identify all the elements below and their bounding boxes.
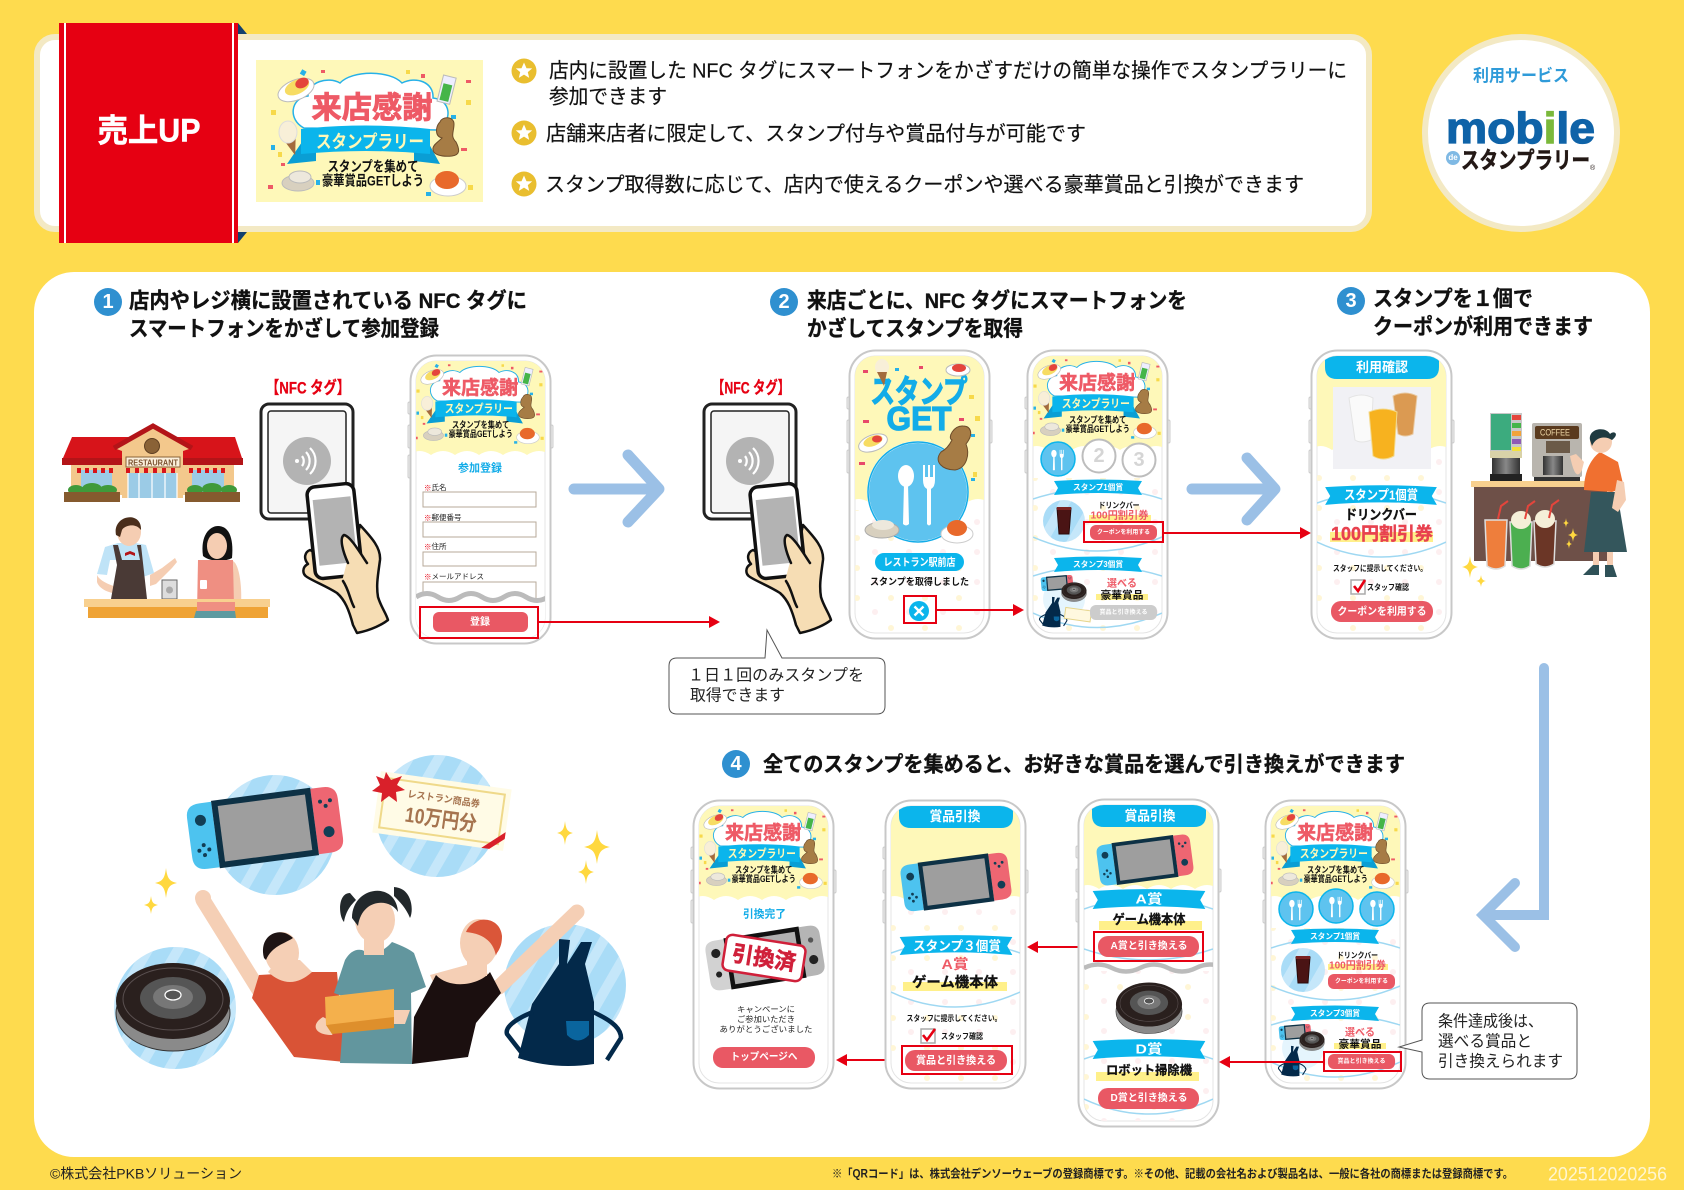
campaign banner xyxy=(256,60,483,202)
tab: 賞品引換 xyxy=(1092,803,1206,827)
redeemed console with stamp xyxy=(704,923,826,993)
thanks message: ご参加いただき xyxy=(737,1014,795,1024)
service badge: mobile de スタンプラリー xyxy=(1425,37,1617,229)
form fields xyxy=(423,482,536,602)
top page button xyxy=(713,1047,815,1068)
prize A: ゲーム機本体 xyxy=(1112,912,1186,927)
prize: apron xyxy=(504,924,626,1066)
tab: 賞品引換: 賞品引換 xyxy=(930,808,981,824)
shop name pill xyxy=(875,553,964,571)
prize heading xyxy=(891,935,1020,1007)
panel: header summary xyxy=(37,23,1369,243)
bullet list: 店内に設置した NFC タグにスマートフォンをかざすだけの簡単な操作でスタンプラリーに xyxy=(549,59,1347,83)
campaign banner in phone: スタンプを集めて xyxy=(1307,864,1364,875)
bullet list: 店舗来店者に限定して、スタンプ付与や賞品付与が可能です xyxy=(546,123,1086,146)
stamp with cutlery xyxy=(856,359,973,543)
register button xyxy=(433,612,528,632)
callout: after completing the conditions xyxy=(1399,1003,1577,1079)
prize A xyxy=(1084,833,1213,961)
illustration: restaurant xyxy=(62,425,243,502)
prize 1: クーポンを利用する xyxy=(1097,528,1150,536)
staff note: スタッフに提示してください。 xyxy=(1333,563,1427,573)
arrow: blue, step 1 to step 2 xyxy=(574,455,659,522)
campaign banner in phone: 来店感謝 xyxy=(725,821,801,844)
category band: 売上UP xyxy=(59,23,247,243)
thanks message: ありがとうございました xyxy=(720,1024,813,1034)
bullet list xyxy=(512,58,1347,197)
thanks message: キャンペーンに xyxy=(737,1005,795,1014)
prize: restaurant voucher: 10万円分 xyxy=(403,804,478,836)
prize 1 xyxy=(1271,928,1400,1000)
form fields: ※住所 xyxy=(424,541,447,551)
arrow: blue, step 2 to step 3 xyxy=(1192,458,1275,520)
title: スタンプ GET xyxy=(872,374,968,431)
campaign banner in phone: スタンプを集めて xyxy=(452,419,509,430)
footer: document code: 202512020256 xyxy=(1548,1164,1667,1185)
campaign banner in phone: 豪華賞品GETしよう xyxy=(1304,873,1368,884)
stamp slots: 3 xyxy=(1133,449,1145,471)
prize 2: 選べる xyxy=(1345,1026,1375,1039)
prize D xyxy=(1084,982,1213,1114)
service badge: mobile de スタンプラリー: de xyxy=(1448,153,1458,162)
campaign banner in phone: スタンプを集めて xyxy=(735,864,792,875)
illustration: hand holding smartphone (second) xyxy=(746,483,831,633)
illustration: NFC tag (first) xyxy=(261,404,353,519)
callout: once a day xyxy=(669,630,885,714)
prize 2: 豪華賞品 xyxy=(1338,1038,1382,1051)
arrow: red, redeem to complete xyxy=(836,1054,903,1066)
form title: 参加登録 xyxy=(458,461,502,475)
prize A: A賞 xyxy=(1136,892,1162,907)
form fields: ※メールアドレス xyxy=(424,572,484,581)
prize: restaurant voucher xyxy=(372,755,512,877)
tab: 賞品引換: 賞品引換 xyxy=(1124,808,1176,824)
thanks message xyxy=(720,1005,813,1034)
prize 2: 選べる xyxy=(1107,577,1137,590)
heading: step 3: クーポンが利用できます xyxy=(1373,314,1593,339)
campaign banner in phone xyxy=(1033,356,1162,450)
tab: 利用確認 xyxy=(1325,355,1439,379)
prize 2: 賞品と引き換える xyxy=(1100,608,1148,616)
person: girl holding a box xyxy=(316,887,426,1064)
checkbox xyxy=(1351,580,1409,594)
bullet list: 参加できます xyxy=(549,86,667,109)
phone: stamp GET xyxy=(847,350,992,638)
phone: coupon confirmation xyxy=(1309,350,1454,638)
illustration: hand holding smartphone (first) xyxy=(303,483,388,633)
prize heading: スタンプ1個賞 xyxy=(1344,488,1418,503)
heading: step 2: かざしてスタンプを取得 xyxy=(807,316,1023,341)
campaign banner: スタンプを集めて xyxy=(328,159,418,175)
prize A: A賞と引き換える xyxy=(1110,939,1188,952)
callout: once a day: 取得できます xyxy=(690,686,785,704)
campaign banner in phone: スタンプラリー xyxy=(1300,848,1368,861)
stamp slots xyxy=(1041,440,1156,476)
prize 1: スタンプ1個賞 xyxy=(1073,482,1123,492)
illustration: restaurant: RESTAURANT xyxy=(128,457,179,467)
footer: trademark note: ※「QRコード」は、株式会社デンソーウェーブの登録商標です。※その他、記載の会社名および製品名は、一般に各社の商標または登録商標です。 xyxy=(832,1167,1513,1181)
title: 引換完了: 引換完了 xyxy=(743,907,786,921)
heading: step 4: 全てのスタンプを集めると、お好きな賞品を選んで引き換えができます xyxy=(763,753,1405,777)
prize 2 xyxy=(1033,556,1162,628)
campaign banner in phone: 来店感謝 xyxy=(442,376,518,399)
prize heading xyxy=(1317,485,1446,557)
prize heading: ドリンクバー xyxy=(1345,508,1417,523)
arrow: blue, step 3 to step 4 xyxy=(1483,668,1544,947)
prize heading: スタンプ３個賞 xyxy=(913,939,1001,954)
illustration: prizes and celebrating people xyxy=(114,755,626,1069)
highlight: redeem button xyxy=(1324,1052,1401,1071)
photo: drinks xyxy=(1333,387,1431,469)
phone: stamp card, complete xyxy=(1262,800,1408,1088)
person: woman raising arm xyxy=(412,912,577,1064)
prize 1: ドリンクバー xyxy=(1337,950,1378,960)
campaign banner in phone: スタンプラリー xyxy=(728,848,796,861)
coupon button xyxy=(1331,601,1433,622)
tab: 賞品引換 xyxy=(899,804,1013,828)
staff note: スタッフに提示してください。 xyxy=(906,1013,1002,1023)
checkbox: スタッフ確認 xyxy=(941,1031,983,1041)
prize heading: ゲーム機本体 xyxy=(912,974,998,990)
prize D: D賞 xyxy=(1136,1042,1162,1057)
prize 1: ドリンクバー xyxy=(1098,500,1140,510)
campaign banner in phone: 来店感謝 xyxy=(1297,821,1373,844)
prize heading: 100円割引券 xyxy=(1331,524,1433,544)
redeem button: 賞品と引き換える xyxy=(916,1054,996,1067)
checkbox: スタッフ確認 xyxy=(1367,582,1409,592)
campaign banner: 来店感謝 xyxy=(312,92,432,125)
game console xyxy=(899,851,1013,913)
campaign banner in phone: 豪華賞品GETしよう xyxy=(449,428,513,439)
redeemed console with stamp: 引換済 xyxy=(730,941,798,975)
category band: 売上UP: 売上UP xyxy=(98,113,200,149)
heading: step 1: 1 xyxy=(102,291,114,313)
prize 1: クーポンを利用する xyxy=(1335,977,1388,985)
prize 2 xyxy=(1271,1006,1400,1077)
prize 1 xyxy=(1033,480,1162,551)
phone: prize list xyxy=(1076,799,1224,1126)
tab: 利用確認: 利用確認 xyxy=(1356,360,1408,375)
prize D: D賞と引き換える xyxy=(1110,1091,1188,1104)
campaign banner in phone: 豪華賞品GETしよう xyxy=(732,873,796,884)
campaign banner in phone: 豪華賞品GETしよう xyxy=(1066,423,1130,434)
illustration: drink bar xyxy=(1462,413,1627,587)
service badge: mobile de スタンプラリー: 利用サービス xyxy=(1473,65,1569,85)
prize 1: スタンプ1個賞 xyxy=(1310,931,1360,941)
campaign banner in phone xyxy=(416,361,545,455)
stamp slots: 2 xyxy=(1093,445,1105,467)
campaign banner in phone: スタンプを集めて xyxy=(1069,414,1126,425)
illustration: NFC tag (second) xyxy=(704,404,796,519)
arrow: red, coupon to confirmation xyxy=(1163,527,1311,539)
service badge: mobile de スタンプラリー: スタンプラリー xyxy=(1461,147,1590,173)
prize 2: スタンプ3個賞 xyxy=(1310,1008,1360,1018)
service badge: mobile de スタンプラリー: mobile xyxy=(1446,104,1595,153)
prize 2: 豪華賞品 xyxy=(1100,589,1144,602)
heading: step 3: スタンプを１個で xyxy=(1373,287,1533,311)
campaign banner: 豪華賞品GETしよう xyxy=(322,173,424,189)
heading: step 2 xyxy=(770,288,1187,341)
service badge: mobile de スタンプラリー: ® xyxy=(1590,164,1596,172)
illustration: drink bar: COFFEE xyxy=(1540,427,1570,437)
callout: after completing the conditions: 引き換えられます xyxy=(1438,1052,1563,1070)
illustration: staff and customer at counter xyxy=(84,517,270,618)
person: man raising arm xyxy=(195,890,345,1062)
heading: step 1: 店内やレジ横に設置されている NFC タグに xyxy=(129,288,527,313)
highlight: register button xyxy=(420,607,538,638)
form fields: ※郵便番号 xyxy=(424,512,462,522)
message: スタンプを取得しました xyxy=(870,576,969,588)
prize 1: 100円割引券 xyxy=(1090,509,1149,522)
prize 2: スタンプ3個賞 xyxy=(1073,559,1123,569)
campaign banner in phone: 来店感謝 xyxy=(1059,371,1135,394)
campaign banner in phone xyxy=(699,806,828,900)
prize heading: A賞 xyxy=(942,956,968,972)
heading: step 2: 2 xyxy=(778,291,790,313)
arrow: red, prize list to prize A xyxy=(1027,941,1094,953)
callout: after completing the conditions: 条件達成後は、 xyxy=(1438,1012,1543,1030)
label: NFC tag (second): 【NFC タグ】 xyxy=(712,377,790,397)
heading: step 3: 3 xyxy=(1345,290,1357,312)
phone: redemption complete xyxy=(690,800,836,1088)
heading: step 4: 4 xyxy=(730,753,742,775)
top page button: トップページへ xyxy=(730,1051,798,1063)
phone: stamp card, one stamp xyxy=(1024,350,1170,638)
heading: step 2: 来店ごとに、NFC タグにスマートフォンを xyxy=(807,288,1187,313)
prize: game console xyxy=(185,775,345,895)
form fields: ※氏名 xyxy=(424,482,446,492)
title: スタンプ GET: GET xyxy=(886,400,952,437)
phone: registration form xyxy=(407,355,553,645)
campaign banner in phone: スタンプラリー xyxy=(1062,398,1130,411)
highlight: coupon button xyxy=(1084,522,1163,542)
campaign banner in phone xyxy=(1262,800,1406,900)
prize 2: 賞品と引き換える xyxy=(1338,1057,1386,1065)
label: NFC tag (first): 【NFC タグ】 xyxy=(266,377,350,397)
redeem button xyxy=(902,1046,1012,1074)
footer: copyright: ©株式会社PKBソリューション xyxy=(50,1166,242,1182)
panel: main steps xyxy=(34,272,1650,1157)
shop name pill: レストラン駅前店 xyxy=(884,556,956,569)
phone: prize A confirmation xyxy=(883,800,1028,1088)
close button xyxy=(904,596,936,623)
title: スタンプ GET: スタンプ xyxy=(870,374,968,410)
prize: restaurant voucher: レストラン商品券 xyxy=(407,788,481,810)
heading: step 1: スマートフォンをかざして参加登録 xyxy=(129,316,439,341)
callout: once a day: １日１回のみスタンプを xyxy=(688,666,864,684)
arrow: red, stamp card to prize list xyxy=(1219,1056,1324,1068)
stamp slots, all filled xyxy=(1279,889,1394,926)
arrow: red, stamp GET to stamp card xyxy=(936,604,1024,616)
heading: step 1 xyxy=(94,288,527,341)
bullet list: スタンプ取得数に応じて、店内で使えるクーポンや選べる豪華賞品と引換ができます xyxy=(545,174,1304,197)
prize 1: 100円割引券 xyxy=(1329,959,1386,972)
coupon button: クーポンを利用する xyxy=(1338,605,1426,618)
sparkles xyxy=(144,821,610,914)
register button: 登録 xyxy=(470,615,490,628)
callout: after completing the conditions: 選べる賞品と xyxy=(1438,1032,1532,1050)
prize D: ロボット掃除機 xyxy=(1106,1063,1192,1078)
checkbox xyxy=(921,1029,983,1043)
heading: step 3 xyxy=(1337,287,1593,339)
prize: robot vacuum xyxy=(114,947,236,1069)
campaign banner: スタンプラリー xyxy=(316,132,424,152)
campaign banner in phone: スタンプラリー xyxy=(445,403,513,416)
arrow: red, register to NFC xyxy=(538,616,720,628)
